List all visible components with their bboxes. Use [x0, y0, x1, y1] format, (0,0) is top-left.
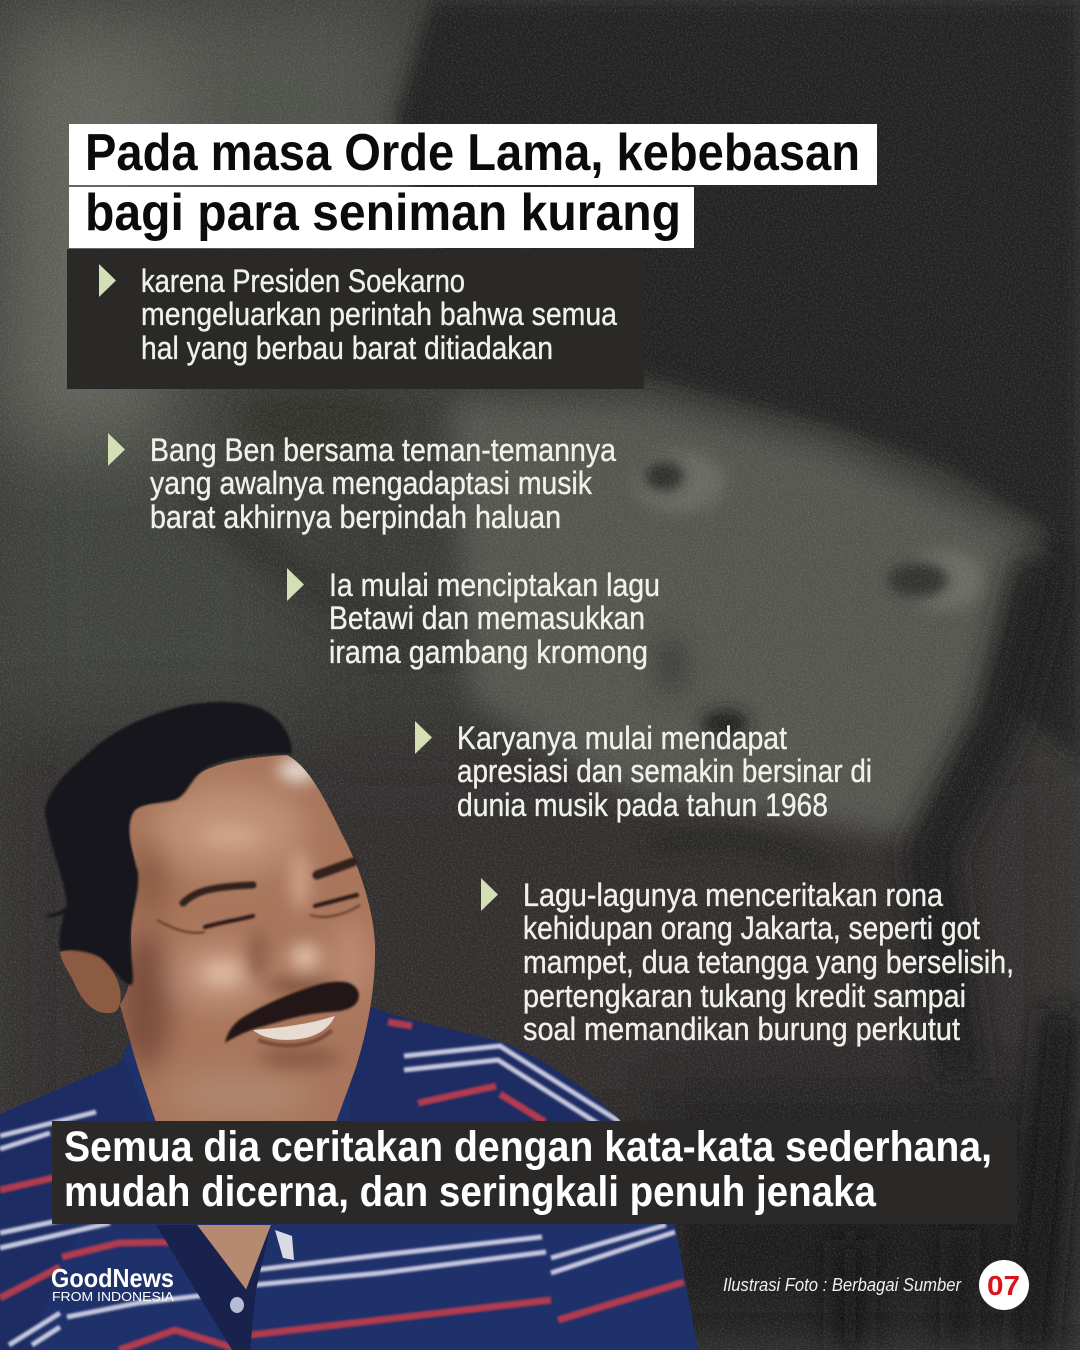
panel: first point on dark box [67, 249, 644, 389]
head and skin shading [120, 755, 376, 1121]
callout: conclusion band [52, 1121, 1017, 1224]
text block 4 [457, 720, 872, 823]
point 3 [287, 567, 660, 670]
text block 5: soal memandikan burung perkutut [523, 1011, 960, 1047]
text block 1: hal yang berbau barat ditiadakan [141, 330, 553, 366]
icon: arrow 1 [99, 264, 116, 297]
open collar [197, 1225, 271, 1290]
text block 3 [329, 567, 660, 670]
point 2 [108, 432, 616, 535]
logo: GoodNews from Indonesia [51, 1263, 175, 1304]
page number badge [979, 1260, 1029, 1310]
text block 5: mampet, dua tetangga yang berselisih, [523, 944, 1014, 980]
point 5 [481, 877, 1014, 1047]
mustache [225, 982, 359, 1043]
smile teeth [253, 1016, 335, 1040]
text block 1: mengeluarkan perintah bahwa semua [141, 296, 617, 332]
text block 5 [523, 877, 1014, 1047]
icon: arrow 5 [481, 878, 498, 911]
logo: GoodNews from Indonesia: GoodNews [51, 1263, 174, 1293]
hat [395, 0, 1080, 760]
photo: smiling man in striped shirt [0, 702, 720, 1350]
text block 3: Ia mulai menciptakan lagu [329, 567, 660, 603]
eyes [635, 452, 985, 610]
text block 3: Betawi dan memasukkan [329, 600, 645, 636]
white stripes [0, 1046, 675, 1345]
eyebrows [183, 862, 353, 903]
face plane [450, 400, 1030, 840]
title line 1: Pada masa Orde Lama, kebebasan [85, 124, 860, 182]
icon: arrow 4 [415, 721, 432, 754]
red stripes [0, 1022, 684, 1350]
text block 2: yang awalnya mengadaptasi musik [150, 465, 593, 501]
page number badge: 07 [987, 1270, 1020, 1301]
icon: arrow 3 [287, 568, 304, 601]
text block 5: Lagu-lagunya menceritakan rona [523, 877, 943, 913]
text block 2 [150, 432, 616, 535]
text block 4: apresiasi dan semakin bersinar di [457, 753, 872, 789]
facial shadows [190, 388, 1060, 1350]
text block 5: pertengkaran tukang kredit sampai [523, 978, 966, 1014]
text block 1: karena Presiden Soekarno [141, 263, 465, 299]
wrinkles [157, 905, 360, 933]
text block 2: barat akhirnya berpindah haluan [150, 499, 561, 535]
callout: conclusion band: mudah dicerna, dan seringkali penuh jenaka [64, 1168, 877, 1216]
icon: arrow 2 [108, 433, 125, 466]
text block 4: Karyanya mulai mendapat [457, 720, 787, 756]
callout: conclusion band: Semua dia ceritakan dengan kata-kata sederhana, [64, 1123, 992, 1171]
text block 1 [141, 263, 617, 366]
text block 5: kehidupan orang Jakarta, seperti got [523, 910, 980, 946]
shirt [0, 1000, 720, 1350]
photo credit: Ilustrasi Foto : Berbagai Sumber [723, 1275, 962, 1295]
title line 2: bagi para seniman kurang [85, 184, 681, 242]
point 4 [415, 720, 872, 823]
text block 2: Bang Ben bersama teman-temannya [150, 432, 616, 468]
text block 3: irama gambang kromong [329, 634, 648, 670]
eyes [205, 895, 357, 927]
text block 4: dunia musik pada tahun 1968 [457, 787, 828, 823]
logo: GoodNews from Indonesia: FROM INDONESIA [52, 1290, 175, 1304]
hair [44, 702, 292, 985]
lower lip [258, 1030, 332, 1045]
ear [60, 949, 121, 1013]
